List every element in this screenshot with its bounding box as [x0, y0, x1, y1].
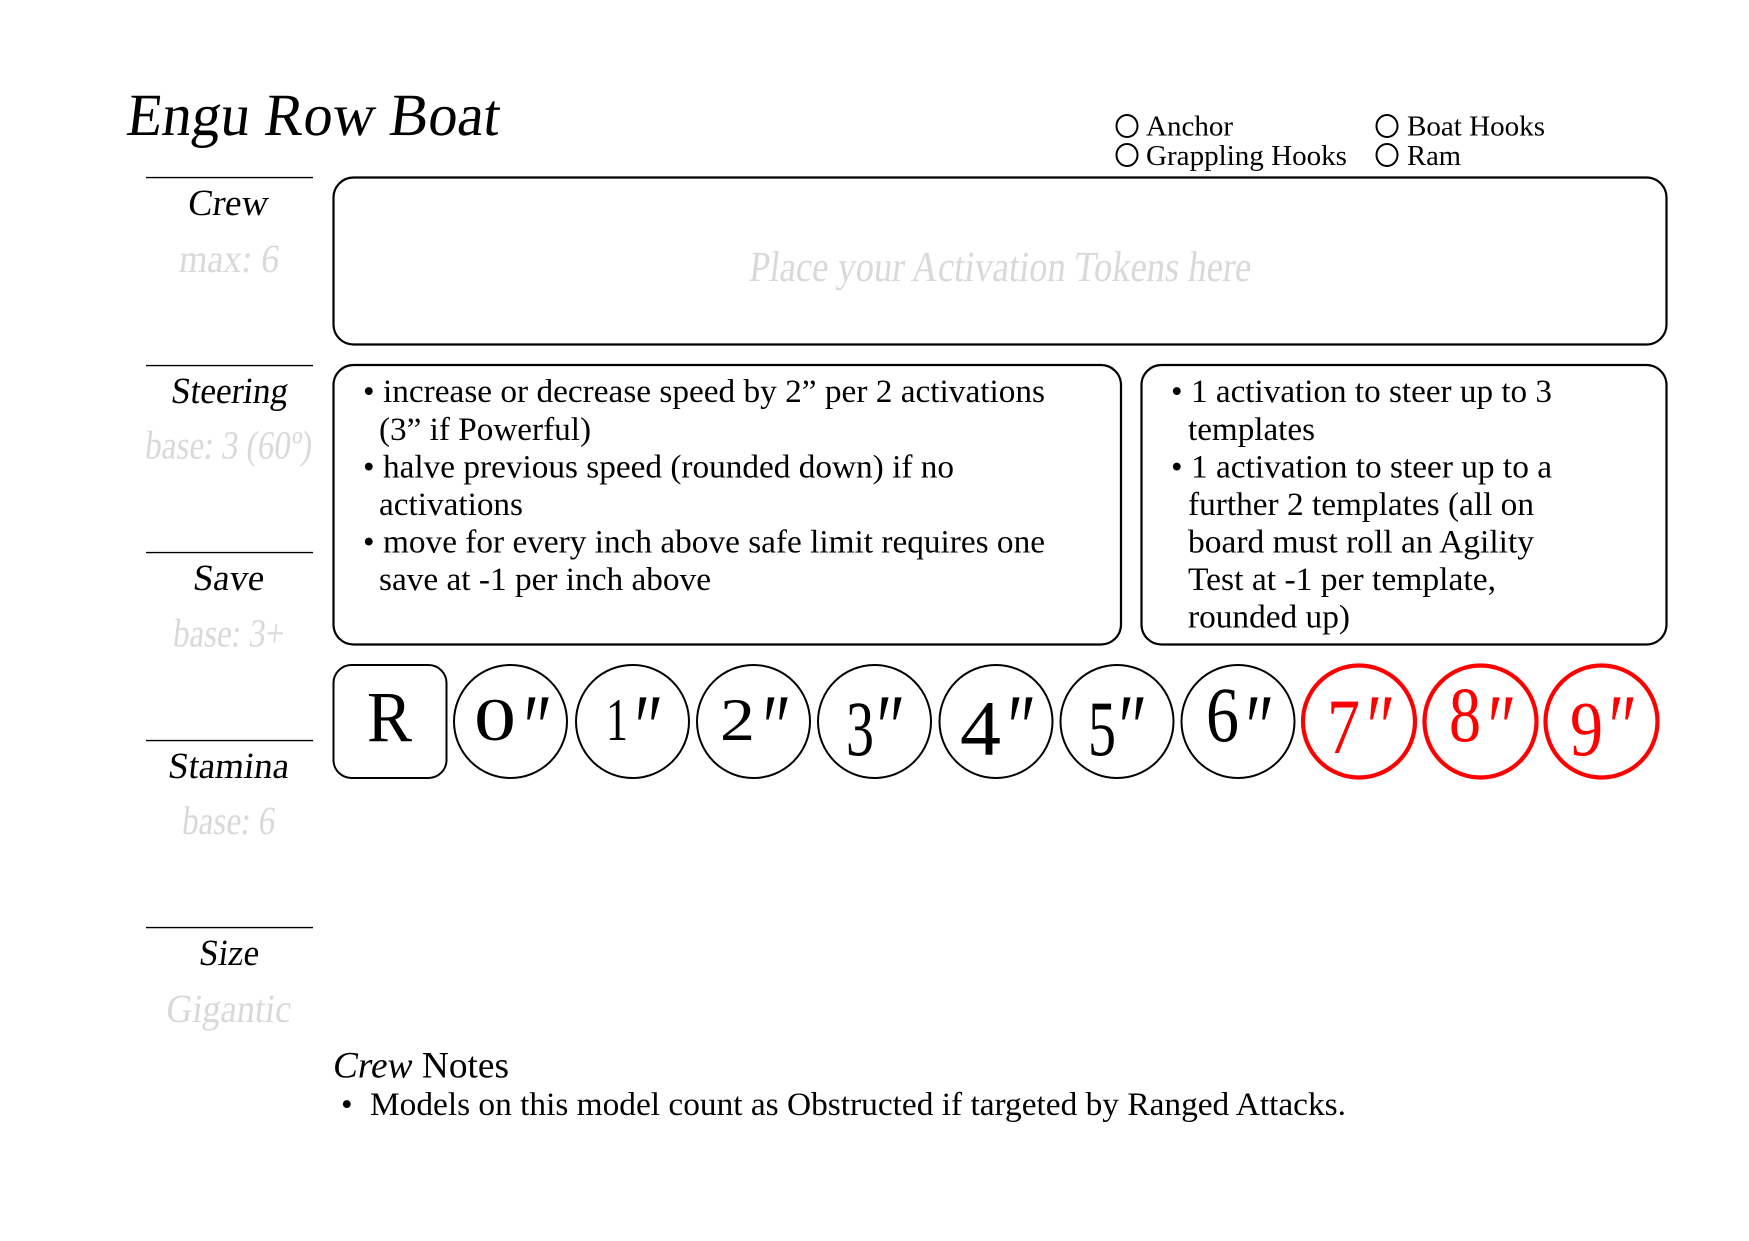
panel: steering rules: •	[1171, 450, 1183, 486]
panel: steering rules: 1 activation to steer up to 3	[1191, 374, 1552, 410]
option: Boat Hooks: Boat Hooks	[1407, 110, 1545, 142]
option: Grappling Hooks: Grappling Hooks	[1146, 140, 1347, 172]
panel: steering rules: Test at -1 per template,	[1188, 562, 1496, 598]
speed: 5 inches: 5	[1088, 685, 1116, 772]
option: Ram: Ram	[1407, 140, 1461, 172]
speed: 9 inches (danger)	[1546, 666, 1658, 780]
stat: Stamina	[146, 741, 313, 843]
crew notes heading: Crew Notes	[333, 1046, 509, 1086]
panel: speed rules: •	[363, 524, 375, 560]
speed: 3 inches: 3	[846, 685, 874, 772]
speed: 2 inches	[697, 665, 810, 780]
stat: Save: base: 3+	[171, 611, 287, 655]
panel: steering rules: templates	[1188, 412, 1315, 448]
panel: speed rules: save at -1 per inch above	[379, 562, 711, 598]
stat sidebar	[143, 178, 315, 1031]
speed: 9 inches (danger): 9	[1570, 685, 1603, 772]
speed: 0 inches	[454, 665, 567, 780]
crew note item: Models on this model count as Obstructed if targeted by Ranged Attacks.	[370, 1087, 1346, 1123]
panel: speed rules: move for every inch above safe limit requires one	[383, 524, 1045, 560]
speed: 9 inches (danger): ″	[1604, 676, 1634, 780]
speed: 5 inches: ″	[1114, 676, 1144, 780]
speed: 6 inches: 6	[1206, 671, 1239, 758]
speed: 7 inches (danger): ″	[1362, 676, 1392, 780]
stat: Steering: base: 3 (60º)	[143, 423, 315, 467]
panel: speed rules: activations	[379, 487, 523, 523]
stat: Crew	[146, 178, 313, 281]
stat: Crew: max: 6	[177, 236, 282, 281]
equipment checklist	[1116, 110, 1545, 172]
stat: Save: Save	[191, 558, 267, 599]
speed: R	[334, 665, 446, 778]
option: Ram	[1376, 140, 1461, 172]
stat: Size: Size	[197, 933, 262, 974]
panel: steering rules: board must roll an Agility	[1188, 524, 1534, 560]
speed: 4 inches: ″	[1003, 676, 1033, 780]
speed: 6 inches	[1182, 665, 1294, 780]
panel: speed rules	[334, 365, 1121, 644]
speed: 3 inches	[818, 665, 931, 780]
panel: speed rules: increase or decrease speed by 2” per 2 activations	[383, 374, 1045, 410]
speed: 1 inch	[576, 665, 689, 780]
speed: 0 inches: 0	[474, 687, 516, 753]
panel: activation tokens: Place your Activation Tokens here	[747, 244, 1255, 291]
speed: 1 inch: 1	[606, 687, 628, 753]
stat: Stamina: Stamina	[166, 746, 292, 787]
panel: steering rules: 1 activation to steer up to a	[1191, 450, 1552, 486]
panel: speed rules: •	[363, 450, 375, 486]
panel: speed rules: •	[363, 374, 375, 410]
speed: 5 inches	[1060, 665, 1174, 780]
speed: R: R	[367, 677, 412, 757]
speed: 4 inches	[940, 665, 1052, 780]
speed: 0 inches: ″	[519, 676, 549, 780]
panel: steering rules: rounded up)	[1188, 600, 1350, 636]
stat: Size: Gigantic	[164, 986, 294, 1031]
speed: 2 inches: ″	[758, 676, 788, 780]
speed: 7 inches (danger): 7	[1327, 683, 1360, 770]
crew notes	[333, 1046, 1346, 1123]
stat: Stamina: base: 6	[180, 798, 278, 843]
speed track	[334, 665, 1658, 780]
speed: 3 inches: ″	[872, 676, 902, 780]
panel: speed rules: (3” if Powerful)	[379, 412, 591, 448]
panel: activation tokens	[334, 178, 1666, 344]
speed: 8 inches (danger): 8	[1449, 671, 1481, 758]
panel: speed rules: halve previous speed (rounded down) if no	[383, 450, 954, 486]
panel: steering rules: further 2 templates (all on	[1188, 487, 1534, 523]
speed: 2 inches: 2	[720, 687, 755, 753]
speed: 1 inch: ″	[630, 676, 660, 780]
option: Anchor: Anchor	[1146, 110, 1233, 142]
speed: 6 inches: ″	[1241, 676, 1271, 780]
speed: 7 inches (danger)	[1303, 666, 1415, 780]
stat: Save	[146, 553, 313, 655]
stat: Steering: Steering	[169, 371, 291, 412]
speed: 8 inches (danger): ″	[1483, 676, 1513, 780]
crew note item: •	[341, 1087, 353, 1123]
speed: 8 inches (danger)	[1424, 666, 1536, 780]
panel: steering rules	[1142, 365, 1666, 644]
stat: Size	[146, 928, 313, 1031]
stat: Crew: Crew	[186, 183, 271, 224]
title: Engu Row Boat	[123, 82, 505, 149]
stat: Steering	[143, 366, 315, 467]
panel: steering rules: •	[1171, 374, 1183, 410]
speed: 4 inches: 4	[960, 685, 1001, 772]
